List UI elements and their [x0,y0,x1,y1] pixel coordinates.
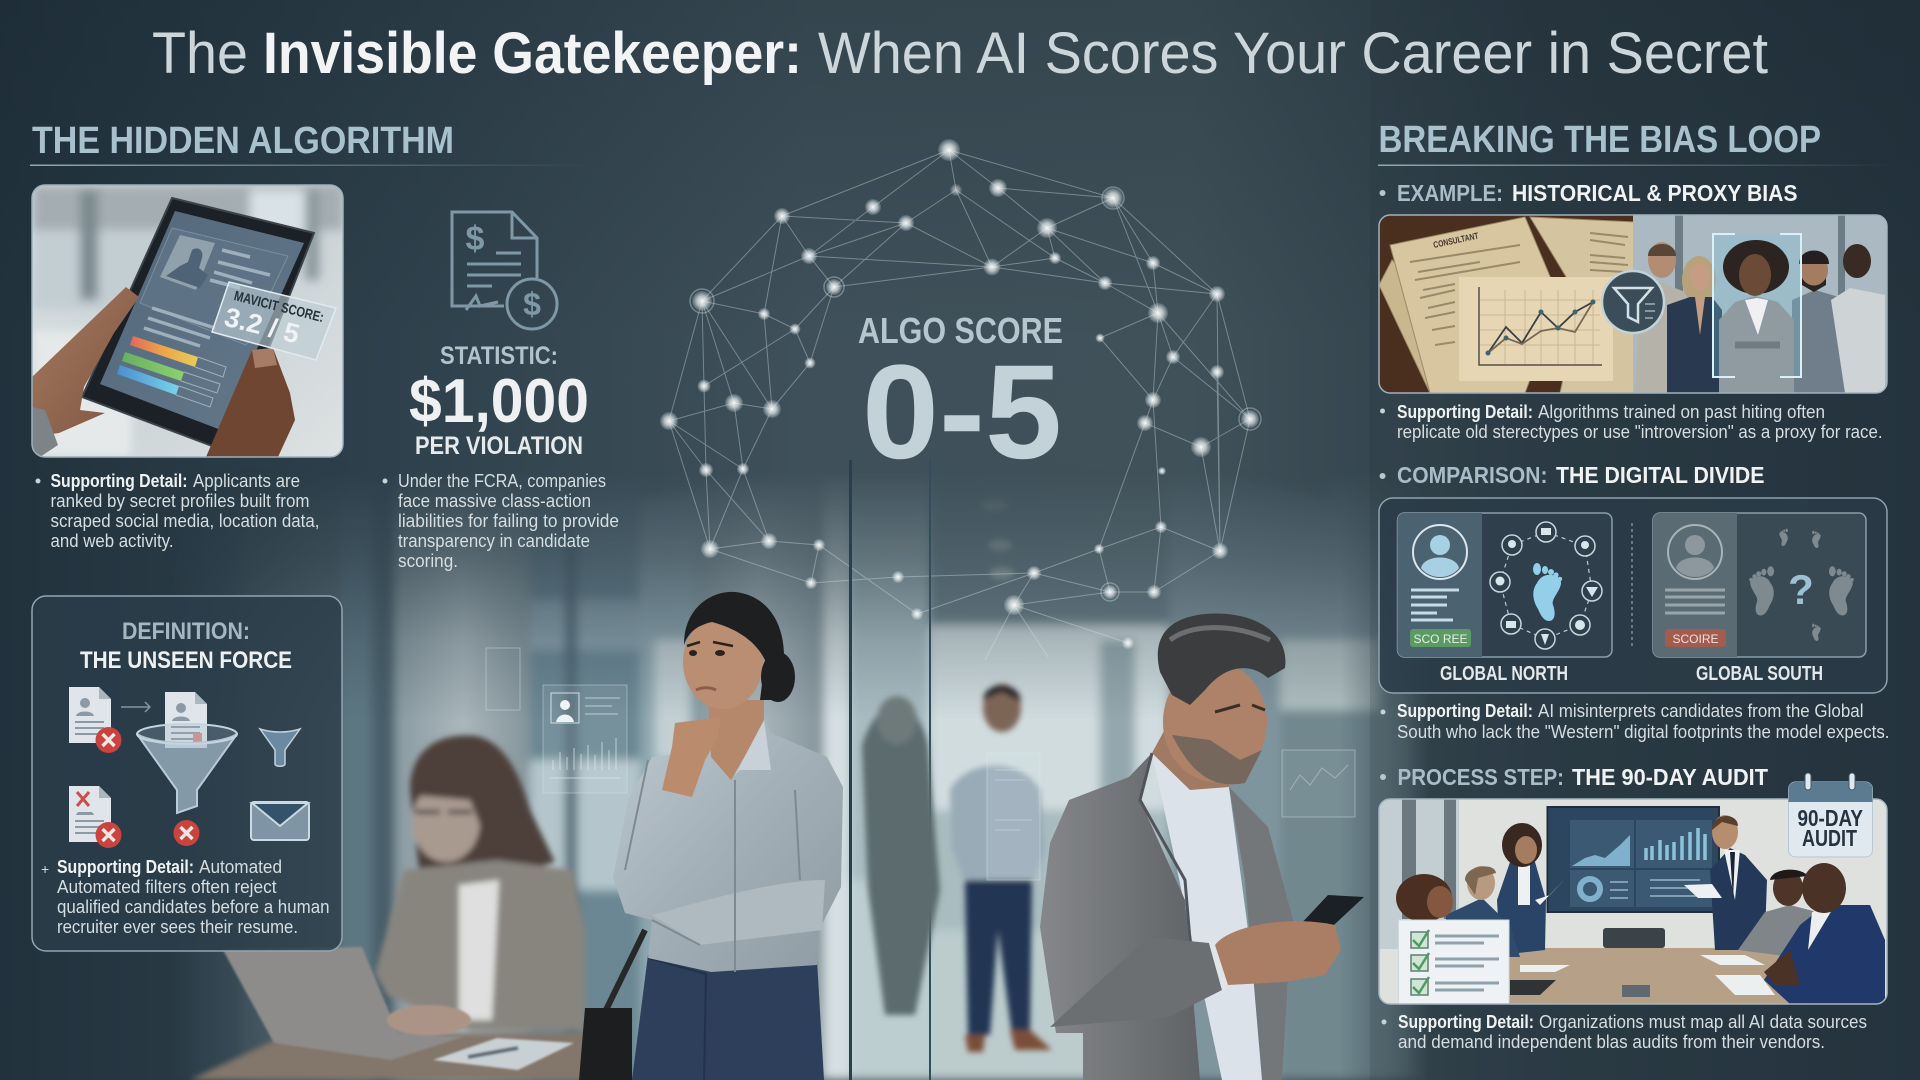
icon: funnel reject mark [174,820,200,846]
text: supporting detail left: ranked by secret profiles built from [50,491,310,511]
heading: comparison digital divide: COMPARISON: [1397,462,1548,488]
statistic: STATISTIC: [440,342,558,370]
score bars [130,336,198,367]
heading: example historical and proxy bias: HISTORICAL & PROXY BIAS [1512,180,1798,206]
text: definition detail [41,857,330,937]
woman presenting [1497,823,1566,955]
text: supporting detail left [36,471,320,551]
panel: tablet with applicant score [32,185,343,457]
wood table [1510,948,1790,1004]
card: global south: SCOIRE [1672,632,1719,646]
hand right [206,348,295,457]
heading: example historical and proxy bias: EXAMPLE: [1397,180,1503,206]
text: supporting detail left: and web activity. [50,531,174,551]
card: global north [1397,513,1612,657]
icon: envelope [251,802,309,840]
icon: funnel with resume [137,692,237,813]
background figures in corridor [862,684,1052,1052]
background: office scene under dark gradient [182,0,1536,1080]
dashboard screen [1548,807,1719,912]
heading: process step 90-day audit: PROCESS STEP: [1398,764,1564,790]
statistic: $1,000 [409,367,589,436]
icon: small funnel [260,729,300,766]
heading: definition: DEFINITION: [122,618,250,645]
heading: process step 90-day audit [1380,764,1768,790]
panel: meeting room photo [1379,799,1887,1004]
foreground man looking at phone [1040,613,1364,1080]
center score: ALGO SCORE [858,310,1063,351]
filter badge [1602,271,1664,333]
overall right column darkening [1370,0,1920,1080]
center score: 0-5 [862,338,1062,487]
ceiling lights [988,503,1014,580]
icon: 90-day audit calendar [1788,773,1872,857]
text: audit detail [1382,1012,1867,1052]
icon: rejected resume with x [69,786,122,848]
text: bias detail: replicate old sterectypes or use "introversion" as a proxy for race. [1397,422,1882,442]
text: FCRA detail: face massive class-action [398,491,591,511]
text: audit detail: and demand independent blas audits from their vendors. [1398,1032,1825,1052]
hand left [32,287,139,437]
heading: example historical and proxy bias [1380,180,1798,206]
text: bias detail: Supporting Detail: [1397,402,1533,422]
icon: rejected resume [69,687,122,753]
text: digital divide detail: South who lack the "Western" digital footprints the model expects. [1397,722,1890,742]
panel: definition the unseen force [32,596,342,951]
icon: 90-day audit calendar: AUDIT [1802,825,1857,851]
man presenting [1684,815,1767,950]
text: bias detail [1380,402,1882,442]
text: FCRA detail: transparency in candidate [398,531,590,551]
text: supporting detail left: Supporting Detail: [50,471,188,491]
text: bias detail: Algorithms trained on past hiting often [1538,402,1825,422]
text: FCRA detail [382,471,619,571]
missing footprints [1749,529,1854,641]
panel: tablet with applicant score: 3.2 / 5 [221,302,302,349]
heading: comparison digital divide: THE DIGITAL DIVIDE [1556,462,1764,488]
panel: historical records and people image: CONSULTANT [1432,231,1480,250]
seated team [1396,863,1885,1004]
title [152,21,1768,86]
labels: GLOBAL SOUTH [1696,663,1823,685]
text: audit detail: Organizations must map all AI data sources [1539,1012,1867,1032]
glass score card [212,282,336,360]
text: FCRA detail: liabilities for failing to provide [398,511,619,531]
tablet device [82,198,314,452]
divider [1631,523,1633,648]
line chart paper [1459,277,1613,381]
labels [1440,663,1823,685]
missing footprints: ? [1788,566,1814,613]
panel: tablet with applicant score: MAVICIT SCORE: [233,287,326,325]
text: definition detail: qualified candidates before a human [57,897,330,917]
text: definition detail: recruiter ever sees their resume. [57,917,298,937]
text: FCRA detail: scoring. [398,551,458,571]
diverse candidates photo [1633,215,1887,393]
title: When AI Scores Your Career in Secret [818,21,1768,86]
footprint data network [1490,522,1602,649]
text: definition detail: Supporting Detail: [57,857,194,877]
network graph around algo score [660,139,1261,660]
text: definition detail: Automated [199,857,282,877]
table papers [1510,955,1775,997]
text: digital divide detail [1380,701,1890,742]
text: digital divide detail: Supporting Detail: [1397,701,1533,721]
title: The [152,21,248,86]
blurred woman at laptop [190,735,600,1080]
glass door frames [849,460,931,1080]
card: global south [1653,513,1866,657]
title: Invisible Gatekeeper: [263,21,802,86]
text: definition detail: + [41,861,49,877]
text: audit detail: Supporting Detail: [1398,1012,1534,1032]
icon: invoice with dollar coin [452,212,557,329]
foreground woman, concerned, hand on chin [579,592,843,1080]
text: definition detail: Automated filters often reject [57,877,276,897]
statistic [409,342,589,460]
heading: definition: THE UNSEEN FORCE [80,647,292,674]
old records [1379,217,1635,393]
text: supporting detail left: scraped social media, location data, [50,511,320,531]
left section heading: THE HIDDEN ALGORITHM [32,120,454,162]
text: digital divide detail: AI misinterprets candidates from the Global [1538,701,1864,721]
checklist card [1398,920,1509,1004]
heading: definition [80,618,292,674]
text: supporting detail left: Applicants are [193,471,300,491]
card: global north: SCO REE [1413,632,1468,646]
heading: comparison digital divide [1380,462,1764,488]
holographic data cards [486,648,1355,880]
panel: digital divide comparison [1379,498,1887,693]
heading: process step 90-day audit: THE 90-DAY AUDIT [1572,764,1768,790]
text: FCRA detail: Under the FCRA, companies [398,471,606,491]
icon: invoice with dollar coin: $ [523,286,541,322]
icon: 90-day audit calendar: 90-DAY [1798,805,1863,831]
panel: historical records and people image [1379,215,1887,393]
statistic: PER VIOLATION [415,432,583,460]
labels: GLOBAL NORTH [1440,663,1568,685]
icon: invoice with dollar coin: $ [466,220,485,258]
icon: arrow [121,702,150,712]
right section heading: BREAKING THE BIAS LOOP [1378,119,1821,161]
